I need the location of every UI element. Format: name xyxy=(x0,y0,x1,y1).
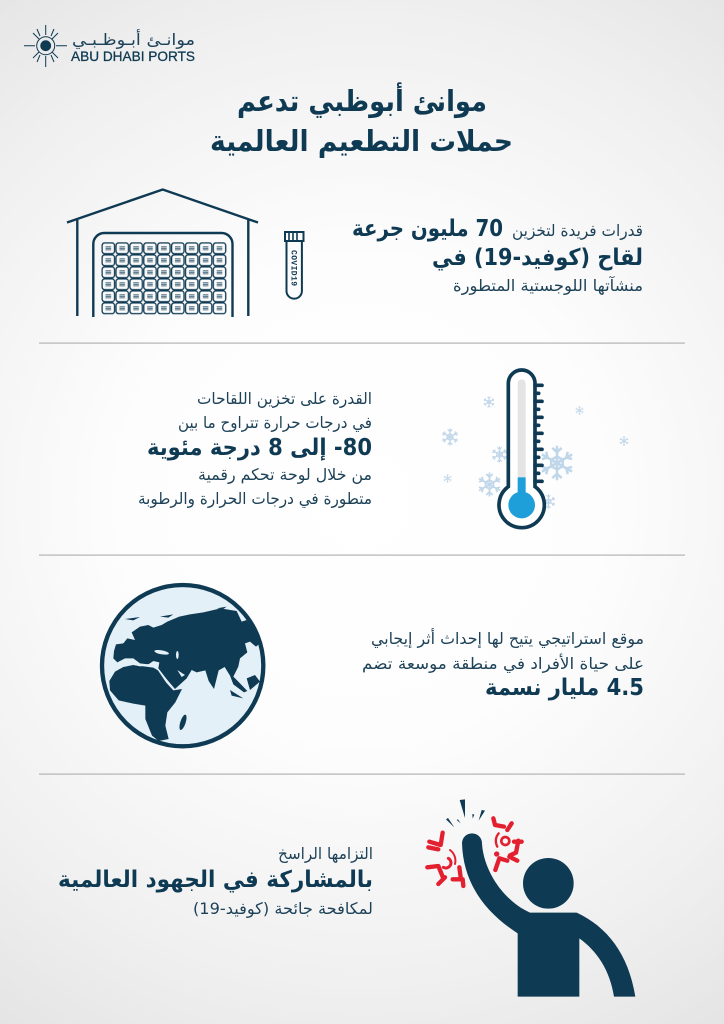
text: global commitment: التزامها الراسخ xyxy=(278,844,373,864)
icon: thermometer xyxy=(499,370,544,528)
logo english name: ABU DHABI PORTS xyxy=(71,49,195,64)
text: storage capacity: منشآتها اللوجستية المتطورة xyxy=(453,276,643,296)
icon: vaccine tube: COVID19 xyxy=(288,250,298,286)
panel: global commitment xyxy=(58,799,635,997)
panel: storage capacity xyxy=(67,190,643,317)
text: temperature range: من خلال لوحة تحكم رقمية xyxy=(198,465,372,485)
logo: Abu Dhabi Ports xyxy=(24,25,195,67)
text: temperature range: 80- إلى 8 درجة مئوية xyxy=(147,435,372,461)
person xyxy=(462,833,635,997)
virus right xyxy=(493,818,522,870)
logo arabic name: موانـئ أبـوظـبـي xyxy=(72,29,195,50)
text: temperature range: القدرة على تخزين اللقاحات xyxy=(197,389,372,409)
icon: vaccine tube xyxy=(285,232,304,299)
text: strategic location xyxy=(362,628,644,701)
title xyxy=(210,82,513,158)
text: temperature range: متطورة في درجات الحرارة والرطوبة xyxy=(138,489,372,509)
text: temperature range xyxy=(138,389,372,509)
text: temperature range: في درجات حرارة تتراوح ما بين xyxy=(178,413,372,433)
panel: strategic location xyxy=(102,585,644,746)
icon: globe xyxy=(102,585,263,746)
text: strategic location: على حياة الأفراد في منطقة موسعة تضم xyxy=(362,653,644,674)
panel: temperature range xyxy=(138,370,628,528)
text: strategic location: 4.5 مليار نسمة xyxy=(485,675,644,701)
virus left xyxy=(427,833,463,886)
text: global commitment: بالمشاركة في الجهود العالمية xyxy=(58,867,373,893)
title: موانئ أبوظبي تدعم xyxy=(237,82,487,118)
text: storage capacity xyxy=(352,216,643,296)
icon: snowflakes xyxy=(442,396,628,509)
text: global commitment: لمكافحة جائحة (كوفيد-19) xyxy=(193,899,373,919)
text: storage capacity: لقاح (كوفيد-19) في xyxy=(432,245,643,271)
icon: logo sun xyxy=(24,25,67,67)
impact rays xyxy=(446,799,485,827)
icon: person striking virus xyxy=(427,799,635,997)
text: global commitment xyxy=(58,844,373,919)
text: storage capacity: 70 مليون جرعة xyxy=(352,216,503,242)
text: strategic location: موقع استراتيجي يتيح لها إحداث أثر إيجابي xyxy=(371,628,644,649)
vaccine racks xyxy=(102,242,227,314)
text: storage capacity: قدرات فريدة لتخزين xyxy=(512,221,643,241)
icon: warehouse xyxy=(67,190,258,317)
title: حملات التطعيم العالمية xyxy=(210,124,513,158)
